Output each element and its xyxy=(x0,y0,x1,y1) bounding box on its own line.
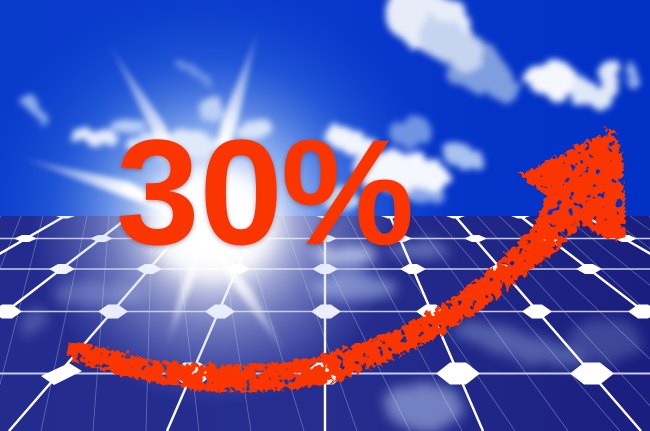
panel horizontal bus lines xyxy=(0,238,650,374)
heading: 30%: 30% xyxy=(116,108,414,276)
arrow head xyxy=(515,126,623,238)
sun glow xyxy=(12,18,421,216)
clouds: left xyxy=(18,53,273,159)
panel junction nodes xyxy=(0,214,650,385)
clouds: upper right xyxy=(376,0,644,115)
sun core xyxy=(150,173,274,277)
solar panel array xyxy=(0,214,650,431)
panel vertical bus lines xyxy=(0,216,650,431)
panel cloud reflections xyxy=(15,241,640,431)
arrow shaft xyxy=(66,188,574,389)
panel fine lines xyxy=(0,216,650,431)
panel surface xyxy=(0,216,650,431)
sun rays xyxy=(18,28,288,358)
arrow: rising red brush stroke xyxy=(66,126,623,389)
sun glare on panels xyxy=(42,216,390,394)
clouds: middle xyxy=(320,119,490,212)
sky background xyxy=(0,0,650,216)
